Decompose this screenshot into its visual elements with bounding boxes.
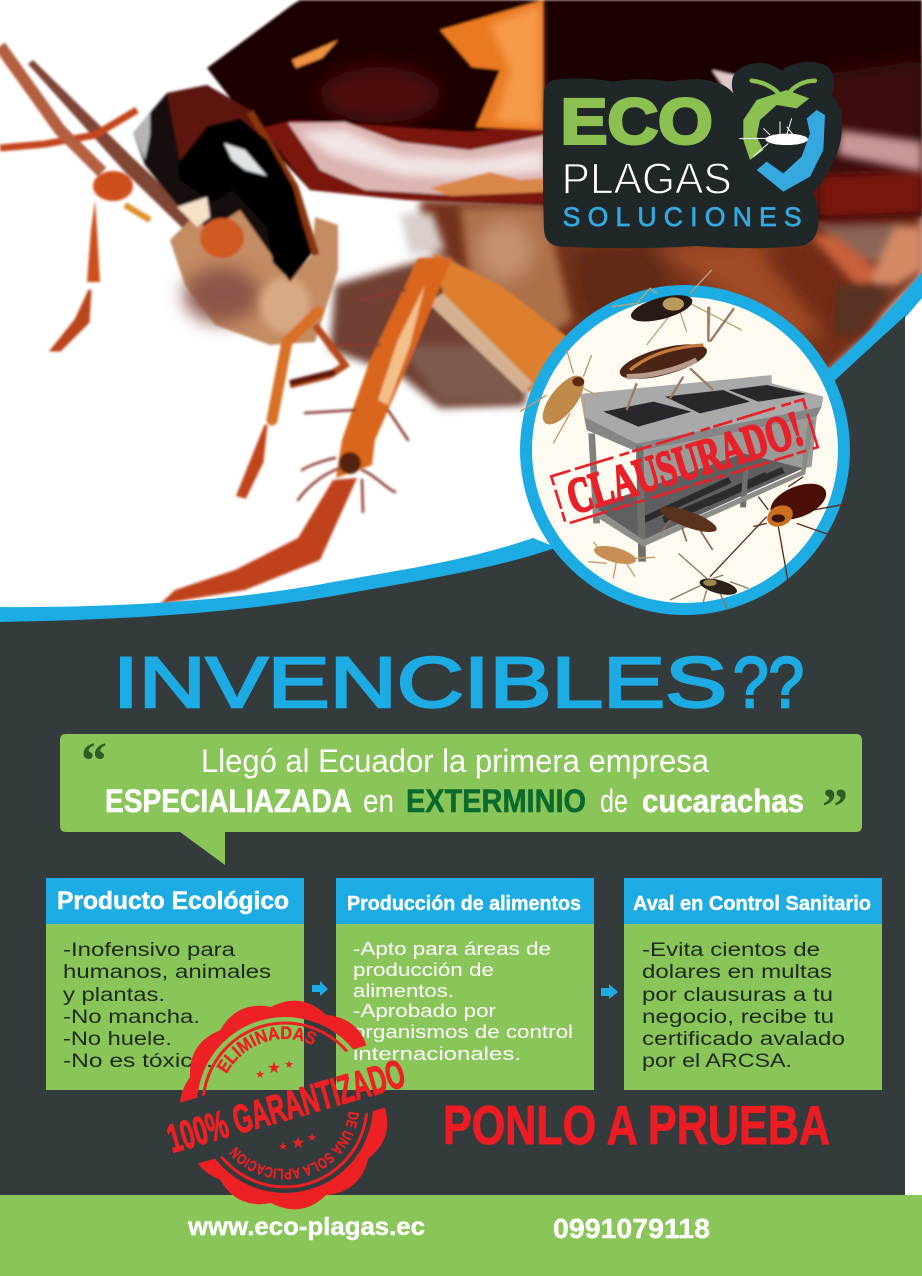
carapace — [207, 0, 922, 220]
footer bar — [0, 1195, 922, 1276]
bubble line two: EXTERMINIO — [406, 783, 586, 819]
body text: dolares en multas — [642, 962, 832, 983]
right shell highlights — [712, 70, 922, 172]
stamp stars: ★ — [307, 1131, 317, 1144]
bubble line one: Llegó al Ecuador la primera empresa — [201, 743, 709, 779]
stamp main text: 100% GARANTIZADO — [162, 1052, 410, 1162]
logo word ECO: ECO — [561, 85, 713, 157]
arrow one — [312, 981, 328, 996]
body text — [353, 939, 573, 1064]
dark background panel — [0, 316, 905, 1195]
stamp stars — [255, 1058, 317, 1153]
antenna front — [0, 46, 102, 172]
underbody patches — [400, 207, 922, 380]
body text: y plantas. — [63, 985, 165, 1006]
stamp stars: ★ — [278, 1140, 288, 1153]
panel: Producto Ecologico — [46, 878, 304, 1090]
carapace red glow — [262, 60, 922, 220]
speech bubble — [60, 733, 862, 865]
heading: Aval en Control Sanitario — [633, 893, 871, 915]
logo word PLAGAS: PLAGAS — [562, 155, 732, 203]
body text: -Apto para áreas de — [353, 939, 551, 959]
heading: Producción de alimentos — [347, 893, 581, 915]
closing quote: ” — [822, 779, 848, 836]
shield icon — [739, 81, 825, 192]
big femur — [433, 253, 567, 393]
bubble line two: de — [600, 783, 628, 819]
title: ?? — [733, 644, 804, 723]
carapace orange patch — [440, 0, 543, 130]
title — [113, 644, 804, 723]
footer phone: 0991079118 — [553, 1213, 710, 1244]
cockroach under stove — [657, 502, 719, 550]
photo: cockroach close-up — [0, 0, 922, 604]
panel: Produccion de alimentos — [336, 878, 594, 1090]
body text: organismos de control — [353, 1022, 573, 1042]
bubble line two: cucarachas — [642, 783, 804, 819]
stamp: 100% garantizado — [162, 1000, 410, 1210]
heading: Producto Ecológico — [57, 887, 289, 915]
bubble line two — [105, 783, 804, 819]
body text: -No huele. — [63, 1029, 172, 1050]
floor shadow — [330, 255, 530, 408]
cockroach bottom tan — [588, 542, 655, 578]
body text: humanos, animales — [63, 962, 271, 983]
stamp lower ring — [198, 1108, 388, 1210]
body text: -Aprobado por — [353, 1001, 496, 1021]
panel: Aval en Control Sanitario — [624, 878, 882, 1090]
stamp stars: ★ — [291, 1133, 305, 1152]
stamp upper ring — [180, 1000, 366, 1103]
stamp: clausurado: CLAUSURADO! — [560, 400, 809, 525]
stamp stars: ★ — [255, 1068, 265, 1081]
body text: certificado avalado — [642, 1029, 845, 1050]
body text: negocio, recibe tu — [642, 1007, 834, 1028]
right white margin — [905, 298, 922, 1196]
stamp bottom text: DE UNA SOLA APLICACION — [228, 1112, 360, 1180]
body text: internacionales. — [353, 1044, 521, 1064]
footer website: www.eco-plagas.ec — [187, 1213, 425, 1241]
big tibia leg — [336, 258, 452, 478]
body text: -Inofensivo para — [63, 940, 236, 961]
bubble line two: en — [363, 783, 394, 819]
middle leg — [272, 312, 318, 420]
title: INVENCIBLES — [113, 644, 727, 723]
logo word SOLUCIONES: SOLUCIONES — [563, 202, 802, 232]
cockroach bottom small — [670, 553, 748, 608]
cockroach on stove — [616, 307, 734, 410]
leg spines — [298, 290, 408, 512]
body text: producción de — [353, 960, 494, 980]
carapace white band — [288, 122, 546, 195]
logo: Eco Plagas Soluciones — [543, 62, 842, 248]
head shell — [133, 85, 312, 282]
stove — [580, 375, 823, 562]
antenna base — [200, 218, 244, 258]
face — [170, 205, 338, 345]
far legs — [0, 110, 137, 148]
body text: por el ARCSA. — [642, 1051, 792, 1072]
cockroach left — [520, 350, 598, 443]
antenna rear — [28, 60, 218, 250]
body text: -No mancha. — [63, 1007, 200, 1028]
underbody base — [420, 200, 922, 385]
left leg — [125, 205, 150, 220]
logo backing — [543, 62, 842, 248]
black eye — [178, 120, 310, 280]
circle frame — [520, 285, 850, 615]
blue curved band — [0, 272, 922, 640]
arrow two — [601, 984, 618, 999]
opening quote: “ — [81, 733, 107, 790]
circle interior — [532, 297, 838, 603]
stamp stars: ★ — [267, 1058, 281, 1077]
stamp: clausurado — [551, 397, 819, 528]
body text: -Evita cientos de — [642, 940, 820, 961]
stamp stars: ★ — [284, 1058, 294, 1071]
body text: alimentos. — [353, 981, 454, 1001]
body text — [63, 940, 271, 1072]
body text — [642, 940, 845, 1072]
circle inset: stove with cockroaches and stamp — [520, 270, 850, 615]
cockroach top — [612, 270, 742, 345]
body text: por clausuras a tu — [642, 985, 833, 1006]
stamp top text: ELIMINADAS — [216, 1026, 316, 1074]
bubble line two: ESPECIALIAZADA — [105, 783, 352, 819]
cockroach red — [710, 476, 850, 583]
body text: -No es tóxico. — [63, 1051, 213, 1072]
